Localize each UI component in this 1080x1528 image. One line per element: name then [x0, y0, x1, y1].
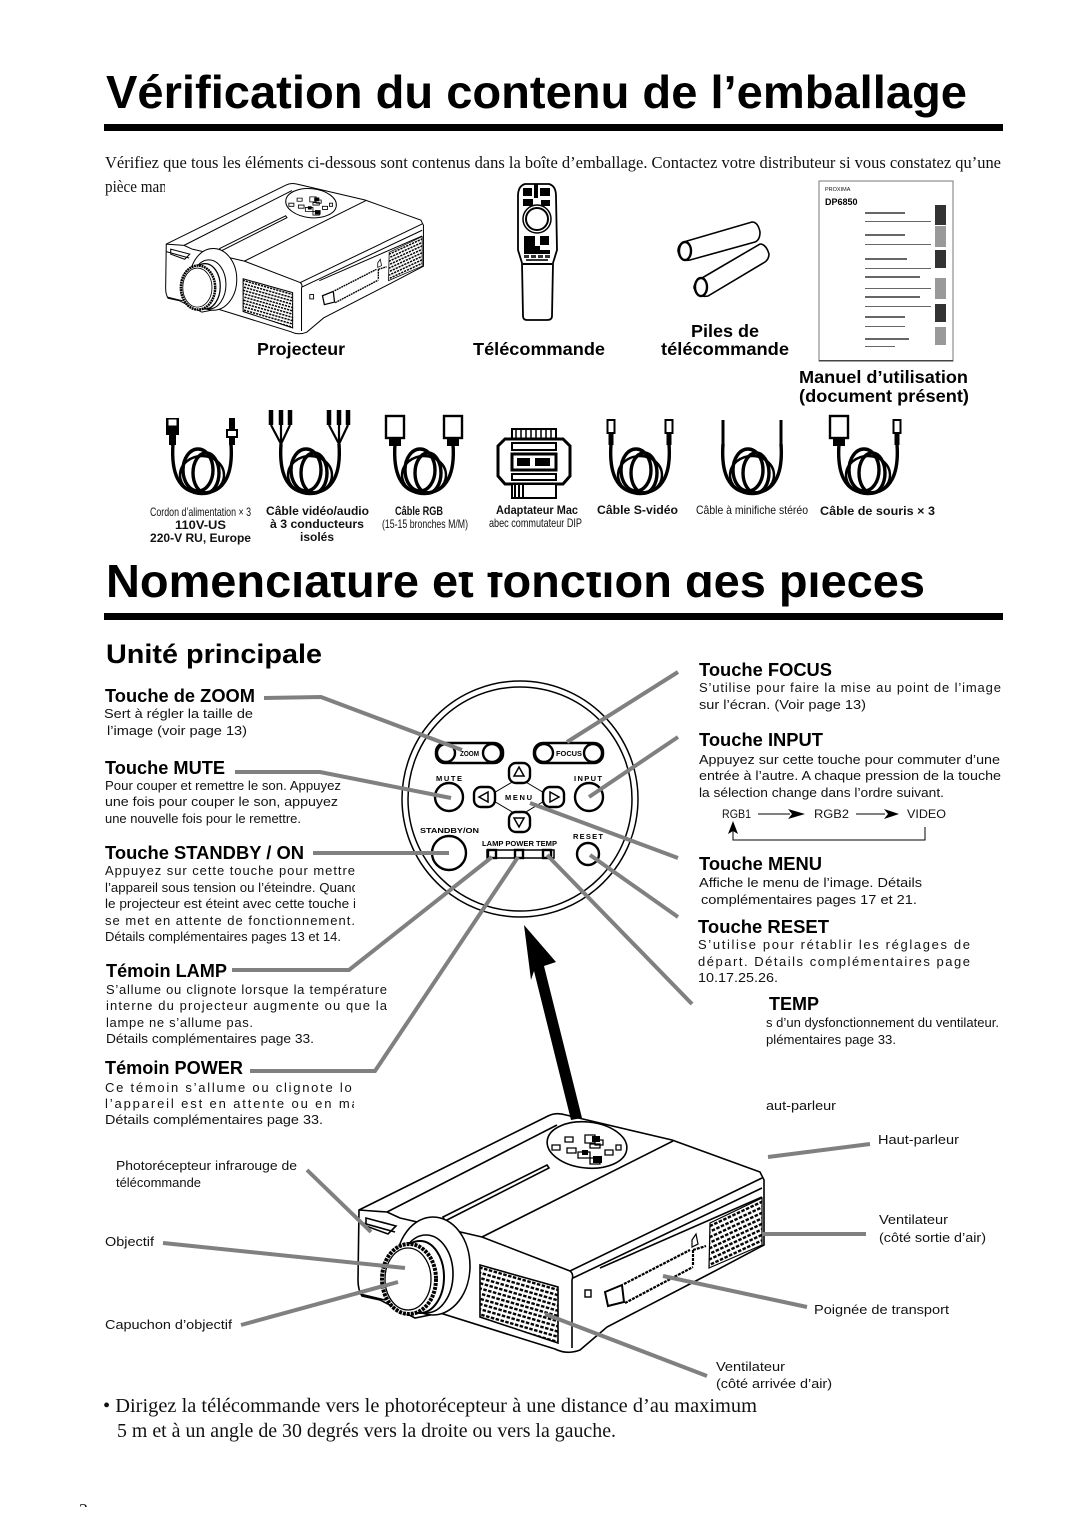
- control panel dial: [402, 681, 638, 917]
- callout: zoom: l’image (voir page 13): [107, 723, 247, 738]
- cable labels: Câble vidéo/audio: [266, 504, 369, 518]
- callout: input: la sélection change dans l’ordre suivant.: [699, 785, 944, 800]
- label: photorécepteur: Photorécepteur infrarouge de: [116, 1158, 297, 1173]
- label: ventilateur arrivée: [716, 1359, 832, 1391]
- focus button: FOCUS: [556, 749, 582, 758]
- callout: lamp: Détails complémentaires page 33.: [106, 1031, 314, 1046]
- cable labels: [150, 503, 935, 545]
- callout: power: [105, 1058, 404, 1127]
- label: manuel: (document présent): [799, 386, 969, 406]
- callout: standby: se met en attente de fonctionnement.: [105, 913, 355, 928]
- callout: mute: Touche MUTE: [105, 758, 225, 778]
- focus button: [534, 743, 603, 763]
- cable labels: 220-V RU, Europe: [150, 531, 251, 545]
- led indicators: LAMP POWER TEMP: [482, 839, 557, 848]
- page number clipped: 2: [79, 1500, 88, 1520]
- label: piles: Piles de: [691, 321, 759, 341]
- callout: mute: une fois pour couper le son, appuyez: [105, 794, 338, 809]
- page number clipped: [70, 1500, 100, 1528]
- illustration: manual: [819, 181, 953, 362]
- cable labels: Câble à minifiche stéréo: [696, 503, 808, 517]
- callout: lamp: [106, 961, 388, 1046]
- reset button: RESET: [573, 832, 603, 841]
- arrow: big black: [524, 925, 582, 1120]
- icon: RGB cable: [386, 416, 462, 494]
- label: poignée: Poignée de transport: [814, 1302, 949, 1317]
- callout: power: l’appareil est en attente ou en marche.: [105, 1096, 397, 1111]
- callout: standby: l’appareil sous tension ou l’éteindre. Quand: [105, 880, 359, 895]
- label: télécommande: Télécommande: [473, 339, 605, 359]
- intro text: pièce manquante.: [105, 177, 211, 196]
- cable labels: Adaptateur Mac: [496, 503, 578, 517]
- illustration: projector small: [166, 183, 423, 334]
- illustration: projector large: [358, 1114, 764, 1352]
- callout: reset: 10.17.25.26.: [698, 970, 778, 985]
- title rule: [104, 124, 1003, 131]
- callout: focus: [699, 660, 1001, 712]
- icon: S-video cable: [608, 420, 672, 494]
- callout: power: Détails complémentaires page 33.: [105, 1112, 323, 1127]
- cable labels: isolés: [300, 530, 334, 544]
- title: vérification: Vérification du contenu de l’emballage: [106, 66, 967, 118]
- mute button: MUTE: [436, 774, 462, 783]
- bottom note: • Dirigez la télécommande vers le photorécepteur à une distance d’au maximum: [103, 1396, 757, 1417]
- title rule 2: [104, 613, 1003, 620]
- callout: input: entrée à l’autre. A chaque pression de la touche: [699, 768, 1001, 783]
- icon: power cord: [166, 418, 237, 494]
- label: ventilateur sortie: (côté sortie d’air): [879, 1230, 986, 1245]
- callout: menu: complémentaires pages 17 et 21.: [701, 892, 917, 907]
- input sequence diagram: [722, 809, 946, 840]
- icon: Mac adapter: [498, 429, 570, 498]
- cable labels: à 3 conducteurs: [270, 517, 364, 531]
- label: photorécepteur: [116, 1158, 297, 1190]
- standby button: [420, 826, 479, 870]
- input sequence diagram: VIDEO: [907, 809, 946, 821]
- led indicators: [482, 839, 557, 858]
- callout: standby: Touche STANDBY / ON: [105, 843, 304, 863]
- callout: zoom: [104, 686, 255, 738]
- title: nomenclature: Nomenclature et fonction des pièces: [106, 555, 925, 607]
- callout: standby: Détails complémentaires pages 13 et 14.: [105, 929, 341, 944]
- cable labels: Câble S-vidéo: [597, 503, 678, 517]
- callout: menu: Affiche le menu de l’image. Détails: [699, 875, 923, 890]
- cable labels: Câble de souris × 3: [820, 504, 935, 518]
- illustration: batteries: [678, 222, 769, 296]
- zoom button: [436, 743, 503, 763]
- callout: power: Témoin POWER: [105, 1058, 243, 1078]
- label: capuchon: Capuchon d’objectif: [105, 1317, 232, 1332]
- zoom button: ZOOM: [460, 749, 479, 758]
- callout: temp: [766, 994, 999, 1047]
- icon: stereo mini cable: [723, 420, 781, 494]
- label: ventilateur arrivée: (côté arrivée d’air): [716, 1376, 832, 1391]
- callout: zoom: Touche de ZOOM: [105, 686, 255, 706]
- callout: focus: Touche FOCUS: [699, 660, 832, 680]
- bottom note: 5 m et à un angle de 30 degrés vers la droite ou vers la gauche.: [117, 1421, 616, 1442]
- label: ventilateur sortie: Ventilateur: [879, 1212, 949, 1227]
- callout: standby: le projecteur est éteint avec cette touche il: [105, 896, 359, 911]
- intro text: Vérifiez que tous les éléments ci-dessous sont contenus dans la boîte d’emballage. Contactez votre distributeur si vous constatez qu’une: [105, 153, 1001, 172]
- callout: mute: Pour couper et remettre le son. Appuyez: [105, 778, 341, 793]
- icon: video audio cable: [271, 410, 348, 494]
- callout: focus: sur l’écran. (Voir page 13): [699, 697, 866, 712]
- callout: standby: [105, 843, 370, 944]
- cable labels: Cordon d’alimentation × 3: [150, 505, 251, 519]
- icon: mouse cable: [830, 416, 900, 494]
- label: ventilateur arrivée: Ventilateur: [716, 1359, 786, 1374]
- label: piles: télécommande: [661, 339, 789, 359]
- reset button: [573, 832, 603, 865]
- callout: lamp: S’allume ou clignote lorsque la température: [106, 982, 387, 997]
- intro text: [105, 153, 1001, 198]
- leader lines: [163, 672, 870, 1376]
- label: haut-parleur clipped: aut-parleur: [766, 1098, 837, 1113]
- callout: reset: Touche RESET: [698, 917, 829, 937]
- label: projecteur: Projecteur: [257, 339, 345, 359]
- callout: lamp: lampe ne s’allume pas.: [106, 1015, 253, 1030]
- callout: temp: s d’un dysfonctionnement du ventilateur.: [766, 1015, 999, 1030]
- callout: reset: départ. Détails complémentaires page: [698, 954, 970, 969]
- callout: reset: [698, 917, 970, 985]
- label: objectif: Objectif: [105, 1234, 154, 1249]
- label: manuel: [799, 367, 969, 406]
- illustration: manual: DP6850: [825, 197, 858, 207]
- callout: focus: S’utilise pour faire la mise au point de l’image: [699, 680, 1001, 695]
- heading: unité principale: Unité principale: [106, 639, 322, 669]
- callout: reset: S’utilise pour rétablir les réglages de: [698, 937, 970, 952]
- input button: INPUT: [574, 774, 602, 783]
- cable labels: 110V-US: [175, 518, 226, 532]
- callout: menu: Touche MENU: [699, 854, 822, 874]
- callout: power: Ce témoin s’allume ou clignote lorsque: [105, 1080, 393, 1095]
- cable labels: (15-15 bronches M/M): [382, 517, 468, 531]
- label: manuel: Manuel d’utilisation: [799, 367, 968, 387]
- callout: input: Appuyez sur cette touche pour commuter d’une: [699, 752, 1000, 767]
- input sequence diagram: RGB2: [814, 809, 849, 821]
- standby button: STANDBY/ON: [420, 826, 479, 835]
- callout: lamp: interne du projecteur augmente ou que la: [106, 998, 388, 1013]
- callout: menu: [699, 854, 923, 907]
- callout: temp: plémentaires page 33.: [766, 1032, 896, 1047]
- label: ventilateur sortie: [879, 1212, 986, 1245]
- menu cross keys: [474, 763, 564, 832]
- callout: standby: Appuyez sur cette touche pour mettre: [105, 863, 355, 878]
- menu cross keys: MENU: [505, 793, 532, 802]
- input sequence diagram: RGB1: [722, 809, 751, 821]
- input button: [574, 774, 603, 811]
- illustration: manual: PROXIMA: [825, 187, 851, 193]
- callout: temp: TEMP: [769, 994, 819, 1014]
- callout: zoom: Sert à régler la taille de: [104, 706, 253, 721]
- bottom note: [103, 1396, 757, 1442]
- label: photorécepteur: télécommande: [116, 1175, 201, 1190]
- label: piles: [661, 321, 789, 359]
- callout: input: Touche INPUT: [699, 730, 823, 750]
- label: haut-parleur: Haut-parleur: [878, 1132, 960, 1147]
- cable labels: Câble RGB: [395, 504, 443, 518]
- mute button: [435, 774, 463, 811]
- callout: mute: [105, 758, 341, 826]
- callout: input: [699, 730, 1001, 800]
- callout: lamp: Témoin LAMP: [106, 961, 227, 981]
- cable labels: abec commutateur DIP: [489, 516, 582, 530]
- illustration: remote control: [518, 184, 557, 320]
- callout: mute: une nouvelle fois pour le remettre.: [105, 811, 301, 826]
